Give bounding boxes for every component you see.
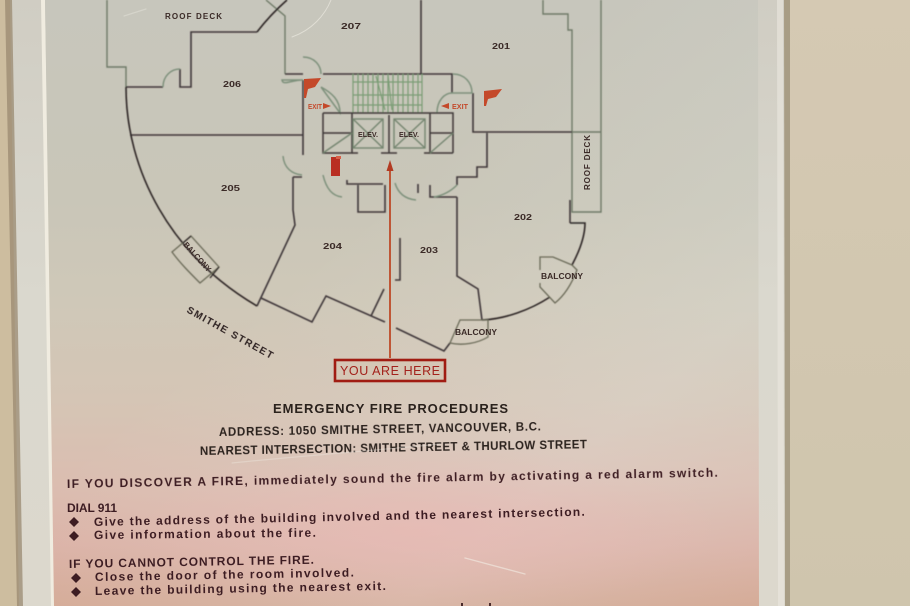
room labels: ELEV. [358, 132, 378, 139]
room labels: 206 [223, 80, 242, 89]
you are here arrow [386, 160, 394, 358]
block: dial 911: DIAL 911 [67, 501, 117, 515]
block: if you cannot control the fire: IF YOU CANNOT CONTROL THE FIRE. [69, 553, 314, 571]
elevator core [323, 113, 453, 153]
room labels: 203 [420, 246, 439, 255]
balcony ticks [183, 236, 219, 278]
room labels: 207 [341, 22, 362, 31]
room labels [165, 12, 592, 337]
cut-off text marks at bottom edge [461, 603, 491, 606]
instruction: if you discover a fire: IF YOU DISCOVER A FIRE, immediately sound the fire alarm by activating a red alarm switch. [67, 466, 718, 491]
stairs [353, 74, 422, 113]
room labels: 201 [492, 42, 511, 51]
address line: ADDRESS: 1050 SMITHE STREET, VANCOUVER, B.C. [219, 421, 541, 439]
block: if you cannot control the fire: Close the door of the room involved. [95, 565, 354, 584]
block: dial 911 [67, 501, 585, 542]
nearest intersection line: NEAREST INTERSECTION: SMITHE STREET & THURLOW STREET [200, 439, 587, 458]
heading: emergency fire procedures: EMERGENCY FIRE PROCEDURES [273, 401, 508, 416]
room labels: BALCONY [455, 328, 498, 337]
block: if you cannot control the fire [69, 553, 386, 598]
icon: fire extinguisher [331, 156, 341, 176]
block: dial 911: Give information about the fire. [94, 526, 316, 542]
you are here callout [335, 360, 445, 381]
block: dial 911: Give the address of the building involved and the nearest intersection. [94, 505, 585, 529]
floor plan [107, 0, 601, 351]
exit sign left: EXIT [308, 104, 323, 111]
outer curved walls [126, 0, 585, 320]
room labels: ELEV. [399, 132, 419, 139]
block: if you cannot control the fire: Leave the building using the nearest exit. [95, 579, 386, 598]
street label: SMITHE STREET [185, 305, 275, 362]
room labels: ROOF DECK [165, 12, 222, 21]
you are here callout: YOU ARE HERE [340, 364, 440, 378]
elevator cars [323, 119, 453, 153]
door swings [163, 57, 472, 200]
exit sign right [441, 103, 469, 111]
icon: flag left [304, 78, 321, 98]
room labels: 202 [514, 213, 533, 222]
exit sign right: EXIT [452, 104, 469, 111]
roof deck outlines [107, 0, 601, 212]
building walls [126, 0, 572, 351]
room labels: 204 [323, 242, 343, 251]
room labels: ROOF DECK [583, 135, 592, 190]
sign panel [45, 0, 759, 606]
left wall strip [0, 0, 23, 606]
room labels: BALCONY [182, 240, 213, 274]
room labels: 205 [221, 184, 241, 193]
room labels: BALCONY [541, 272, 584, 281]
glare scratches [124, 0, 525, 574]
balconies [172, 236, 577, 344]
exit sign left [308, 103, 331, 111]
icon: flag right [484, 89, 502, 106]
